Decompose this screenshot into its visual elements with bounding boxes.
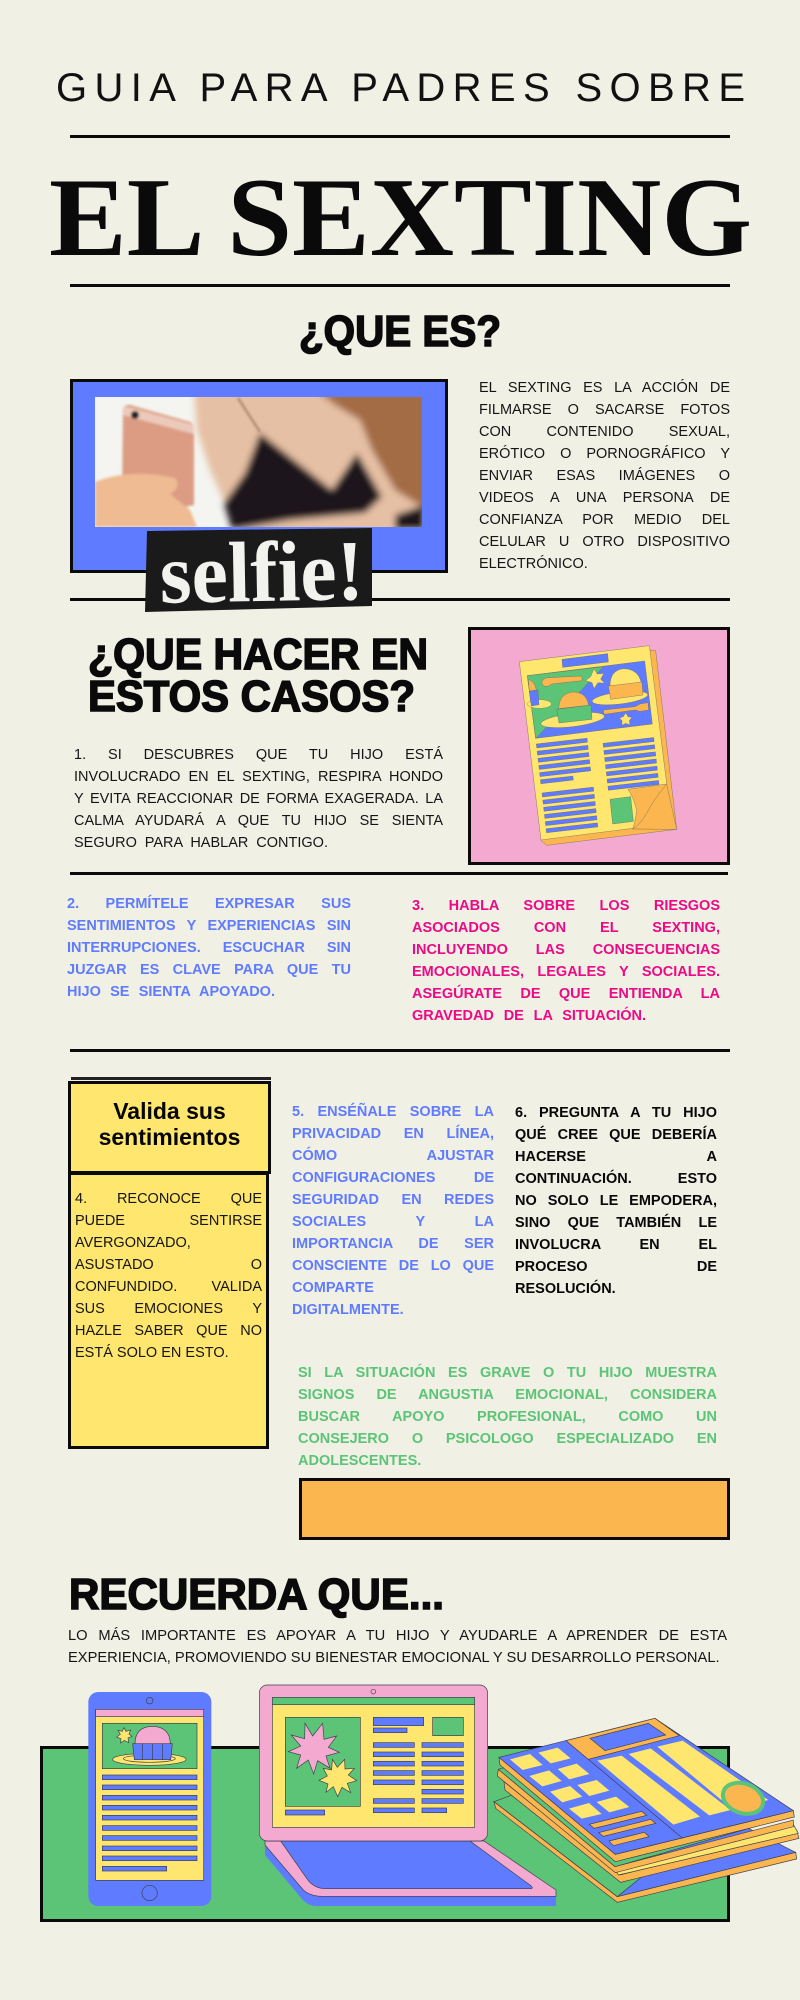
text: definition	[479, 379, 730, 572]
panel: valida heading: Valida sus	[113, 1098, 226, 1124]
text: step 6: 6. PREGUNTA A TU HIJO	[515, 1105, 717, 1121]
text: step 4: PUEDE SENTIRSE	[75, 1213, 262, 1229]
text: step 3: ASOCIADOS CON EL SEXTING,	[412, 920, 720, 936]
section rule above valida	[70, 1049, 730, 1052]
panel: green desk	[42, 1748, 728, 1920]
panel: valida heading	[68, 1081, 271, 1174]
text: step 6: INVOLUCRA EN EL	[515, 1237, 717, 1253]
text: definition: CON CONTENIDO SEXUAL,	[479, 424, 730, 440]
text: step 1	[74, 746, 443, 851]
text: step 1: Y EVITA REACCIONAR DE FORMA EXAGERADA. LA	[74, 791, 443, 807]
text: step 1: INVOLUCRADO EN EL SEXTING, RESPIRA HONDO	[74, 769, 443, 785]
heading: que es: ¿QUE ES?	[299, 307, 501, 356]
text: step 1: SEGURO PARA HABLAR CONTIGO.	[74, 835, 328, 851]
text: step 4: 4. RECONOCE QUE	[75, 1191, 262, 1207]
text: definition: ENVIAR ESAS IMÁGENES O	[479, 468, 730, 484]
section rule below selfie	[70, 598, 730, 601]
text: definition: CELULAR U OTRO DISPOSITIVO	[479, 534, 730, 550]
text: step 1: 1. SI DESCUBRES QUE TU HIJO ESTÁ	[74, 747, 443, 763]
heading: que hacer: ¿QUE HACER EN	[88, 630, 428, 679]
text: step 4: AVERGONZADO,	[75, 1235, 191, 1251]
text: step 5: DIGITALMENTE.	[292, 1302, 404, 1318]
text: step 4: HAZLE SABER QUE NO	[75, 1323, 262, 1339]
icon: phone	[88, 1692, 211, 1906]
text: step 6	[515, 1105, 717, 1297]
icon: newspaper	[519, 645, 677, 846]
text: conclusion	[68, 1627, 727, 1666]
text: step 5: IMPORTANCIA DE SER	[292, 1236, 494, 1252]
text: professional help: SI LA SITUACIÓN ES GRAVE O TU HIJO MUESTRA	[298, 1365, 717, 1381]
text: professional help: BUSCAR APOYO PROFESIONAL, COMO UN	[298, 1409, 717, 1425]
text: step 3: GRAVEDAD DE LA SITUACIÓN.	[412, 1008, 646, 1024]
text: step 2: 2. PERMÍTELE EXPRESAR SUS	[67, 896, 351, 912]
header rule top	[70, 135, 730, 138]
main title: EL SEXTING	[49, 156, 752, 280]
text: conclusion: LO MÁS IMPORTANTE ES APOYAR A TU HIJO Y AYUDARLE A APRENDER DE ESTA	[68, 1628, 727, 1644]
text: step 6: HACERSE A	[515, 1149, 717, 1165]
text: step 5: CONSCIENTE DE LO QUE	[292, 1258, 494, 1274]
text: conclusion: EXPERIENCIA, PROMOVIENDO SU BIENESTAR EMOCIONAL Y SU DESARROLLO PERSONAL.	[68, 1650, 720, 1666]
text: step 5: SEGURIDAD EN REDES	[292, 1192, 494, 1208]
text: step 2: SENTIMIENTOS Y EXPERIENCIAS SIN	[67, 918, 351, 934]
text: step 3: EMOCIONALES, LEGALES Y SOCIALES.	[412, 964, 720, 980]
panel: pink newspaper	[468, 627, 730, 865]
heading: recuerda: RECUERDA QUE...	[69, 1570, 444, 1619]
text: step 4	[75, 1191, 262, 1361]
text: step 6: NO SOLO LE EMPODERA,	[515, 1193, 717, 1209]
text: step 5: PRIVACIDAD EN LÍNEA,	[292, 1126, 494, 1142]
text: step 4: SUS EMOCIONES Y	[75, 1301, 262, 1317]
panel: blue photo frame	[70, 379, 448, 573]
text: step 3	[412, 898, 720, 1024]
text: step 6: RESOLUCIÓN.	[515, 1281, 616, 1297]
text: step 3: INCLUYENDO LAS CONSECUENCIAS	[412, 942, 720, 958]
text: step 6: QUÉ CREE QUE DEBERÍA	[515, 1127, 717, 1143]
text: step 5: COMPARTE	[292, 1280, 374, 1296]
icon: magazines	[494, 1718, 799, 1902]
text: step 1: CALMA AYUDARÁ A QUE TU HIJO SE SIENTA	[74, 813, 443, 829]
text: definition: ELECTRÓNICO.	[479, 556, 588, 572]
decorative offset top	[71, 1077, 271, 1080]
title line: GUIA PARA PADRES SOBRE	[56, 66, 745, 110]
text: step 3: 3. HABLA SOBRE LOS RIESGOS	[412, 898, 720, 914]
text: professional help: CONSEJERO O PSICOLOGO ESPECIALIZADO EN	[298, 1431, 717, 1447]
text: step 5: 5. ENSÉÑALE SOBRE LA	[292, 1104, 494, 1120]
text: definition: FILMARSE O SACARSE FOTOS	[479, 402, 730, 418]
heading: que hacer	[88, 630, 428, 721]
heading: que hacer: ESTOS CASOS?	[88, 672, 415, 721]
panel: valida heading: sentimientos	[99, 1124, 240, 1150]
text: step 5: SOCIALES Y LA	[292, 1214, 494, 1230]
text: step 4: CONFUNDIDO. VALIDA	[75, 1279, 262, 1295]
header rule bottom	[70, 284, 730, 287]
text: definition: VIDEOS A UNA PERSONA DE	[479, 490, 730, 506]
text: step 6: PROCESO DE	[515, 1259, 717, 1275]
panel: step 4 body	[68, 1172, 269, 1449]
text: step 4: ASUSTADO O	[75, 1257, 262, 1273]
text: definition: EL SEXTING ES LA ACCIÓN DE	[479, 380, 730, 396]
selfie clipping label: selfie!	[159, 522, 365, 622]
text: definition: ERÓTICO O PORNOGRÁFICO Y	[479, 446, 730, 462]
text: definition: CONFIANZA POR MEDIO DEL	[479, 512, 730, 528]
panel: orange box	[299, 1478, 730, 1540]
text: step 2: JUZGAR ES CLAVE PARA QUE TU	[67, 962, 351, 978]
text: professional help	[298, 1364, 717, 1469]
icon: laptop	[259, 1685, 556, 1906]
text: step 4: ESTÁ SOLO EN ESTO.	[75, 1345, 229, 1361]
text: step 6: CONTINUACIÓN. ESTO	[515, 1171, 717, 1187]
section rule below pink panel	[70, 872, 728, 875]
text: step 2: HIJO SE SIENTA APOYADO.	[67, 984, 275, 1000]
text: step 6: SINO QUE TAMBIÉN LE	[515, 1215, 717, 1231]
photo: selfie	[95, 397, 422, 527]
text: step 5: CÓMO AJUSTAR	[292, 1148, 494, 1164]
text: professional help: SIGNOS DE ANGUSTIA EMOCIONAL, CONSIDERA	[298, 1387, 717, 1403]
text: step 2: INTERRUPCIONES. ESCUCHAR SIN	[67, 940, 351, 956]
text: step 5	[292, 1102, 494, 1318]
text: step 2	[67, 894, 351, 1000]
text: step 3: ASEGÚRATE DE QUE ENTIENDA LA	[412, 986, 720, 1002]
text: professional help: ADOLESCENTES.	[298, 1453, 421, 1469]
text: step 5: CONFIGURACIONES DE	[292, 1170, 494, 1186]
